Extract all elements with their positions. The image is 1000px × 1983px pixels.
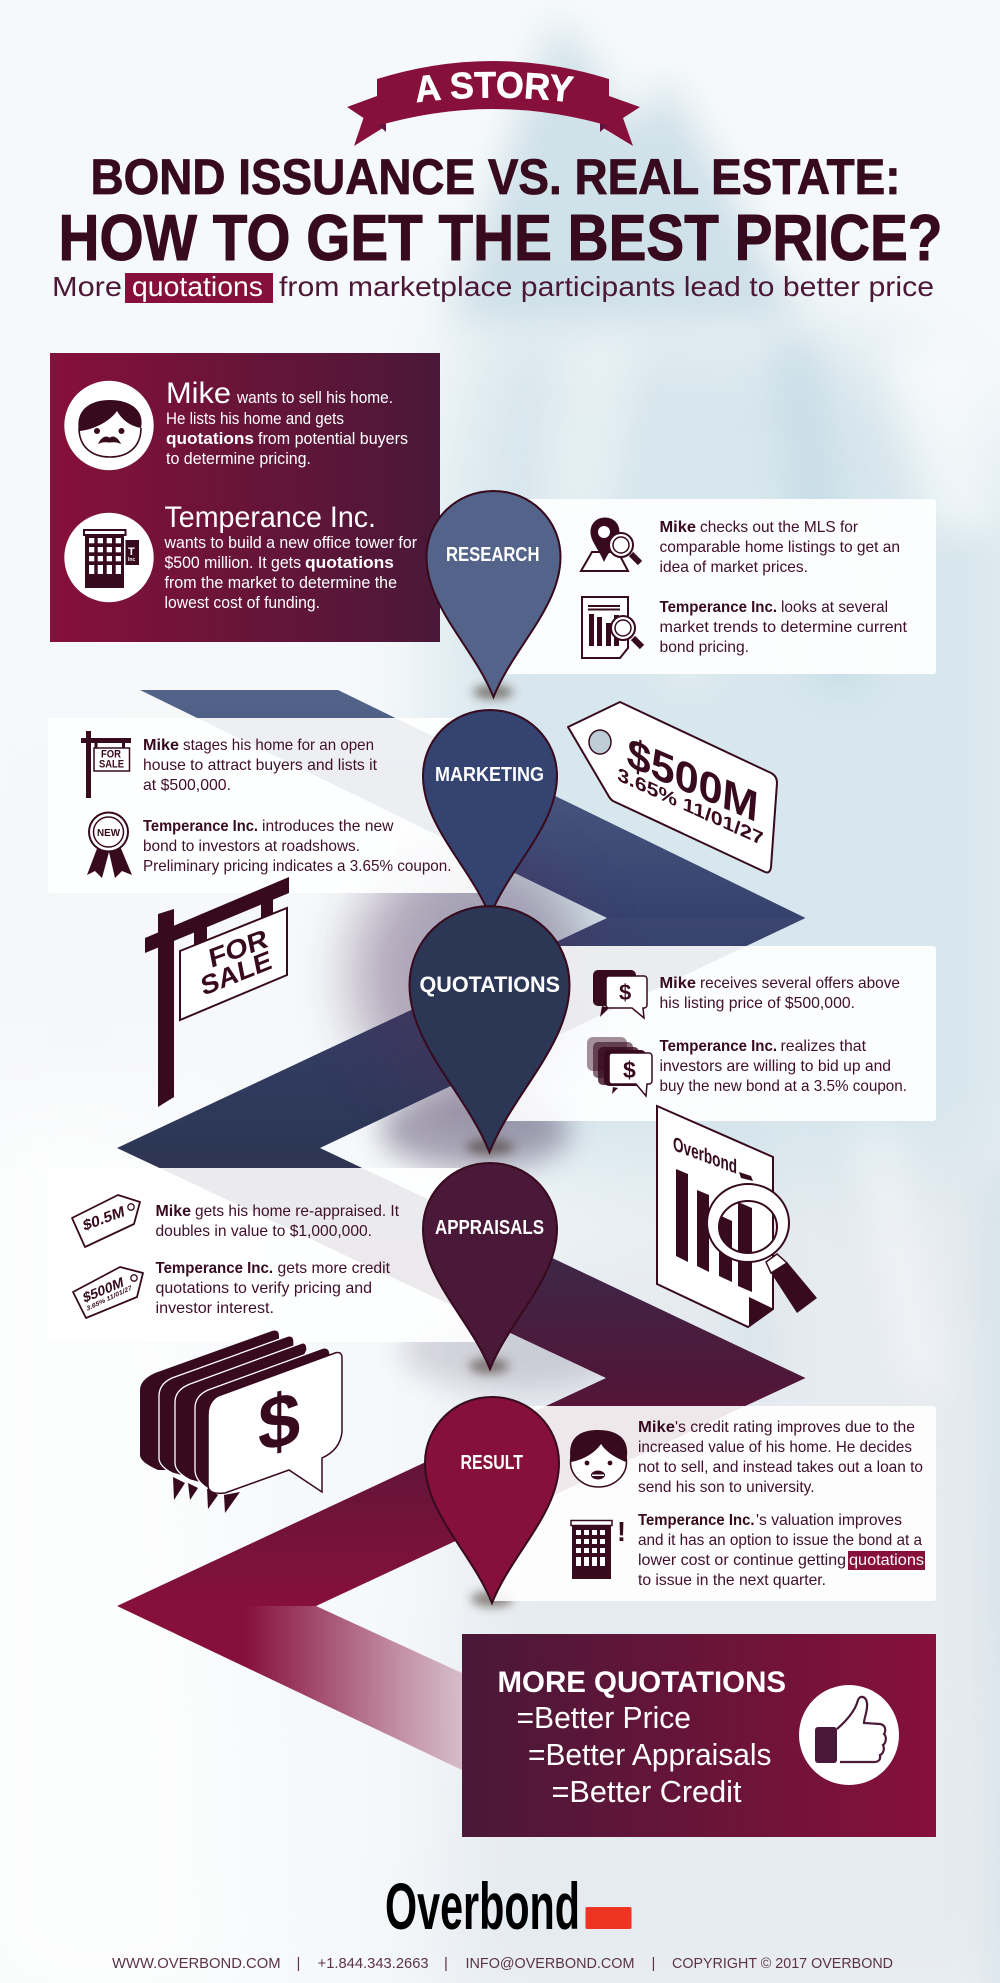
pin: quotations: [410, 906, 569, 1152]
icon: small for-sale sign: SALE: [99, 758, 124, 770]
text: Mike appraisals: doubles in value to $1,000,000.: [156, 1223, 372, 1240]
text: Temperance intro: quotations: [305, 553, 394, 572]
price tag: $500M: [568, 702, 777, 872]
conclusion list: =Better Credit: [552, 1774, 742, 1809]
conclusion list: =Better Appraisals: [528, 1737, 772, 1772]
text: Mike result: send his son to university.: [638, 1479, 814, 1496]
icon: thumbs up: [799, 1685, 899, 1785]
footer contact line: WWW.OVERBOND.COM: [112, 1955, 281, 1972]
icon: Mike portrait: [64, 381, 154, 470]
pin: marketing: [423, 710, 557, 916]
text: Temperance research: market trends to determine current: [660, 619, 908, 636]
text: Mike intro: wants to sell his home.: [236, 388, 393, 407]
text: Mike research: checks out the MLS for: [700, 519, 859, 536]
title: BOND ISSUANCE VS. REAL ESTATE:: [90, 149, 900, 205]
text: Temperance intro: Temperance Inc.: [164, 501, 376, 534]
text: Temperance appraisals: [156, 1260, 391, 1317]
icon: new-issue rosette: [87, 812, 132, 878]
folded ribbon: [117, 690, 806, 1770]
pin shadow: quotations: [466, 1139, 514, 1155]
conclusion list: [516, 1700, 772, 1809]
text: Temperance result: lower cost or continue getting: [638, 1552, 846, 1569]
text: Mike result: 's credit rating improves due to the: [675, 1419, 915, 1436]
text: Temperance appraisals: Temperance Inc.: [156, 1260, 273, 1277]
icon: small for-sale sign: FOR: [101, 748, 121, 760]
icon: Mike's wife portrait: [570, 1430, 627, 1487]
icon: stacked offer bubbles: $: [623, 1057, 636, 1083]
text: Mike marketing: at $500,000.: [143, 777, 231, 794]
icon: Overbond report with magnifier: Overbond: [673, 1133, 737, 1179]
text: Temperance research: bond pricing.: [660, 639, 749, 656]
conclusion list: =Better Price: [516, 1700, 691, 1735]
panel: conclusion: [462, 1634, 936, 1837]
text: Temperance marketing: Preliminary pricing indicates a 3.65% coupon.: [143, 858, 452, 875]
icon: Temperance building: [64, 513, 154, 602]
price tag: $500M: 3.65% 11/01/27: [617, 764, 764, 850]
text: Temperance quotations: investors are willing to bid up and: [660, 1058, 891, 1075]
footer contact line: |: [652, 1955, 655, 1972]
text: Mike research: comparable home listings to get an: [660, 539, 900, 556]
pin: research: RESEARCH: [446, 544, 540, 566]
pin: result: RESULT: [460, 1452, 523, 1474]
icon: large for-sale sign: [145, 877, 289, 1107]
text: Mike quotations: his listing price of $500,000.: [660, 995, 855, 1012]
pin shadow: result: [471, 1591, 513, 1607]
pin: result: [425, 1397, 559, 1603]
icon: small tag $500M: 3.65% 11/01/27: [86, 1285, 132, 1313]
icon: small tag $500M: $500M: [82, 1275, 125, 1307]
footer contact line: |: [444, 1955, 448, 1972]
footer contact line: [112, 1955, 893, 1972]
text: Temperance intro: wants to build a new office tower for: [164, 533, 417, 552]
text: Mike marketing: Mike: [143, 737, 179, 754]
conclusion heading: MORE QUOTATIONS: [498, 1666, 786, 1699]
text: Temperance intro: [164, 501, 417, 612]
text: Mike intro: Mike: [166, 377, 231, 410]
subtitle: from marketplace participants lead to better price: [279, 271, 934, 302]
icon: offer bubble: [593, 970, 647, 1018]
text: Mike intro: from potential buyers: [258, 429, 408, 448]
icon: small tag $500M: [73, 1267, 143, 1318]
icon: large for-sale sign: SALE: [198, 944, 274, 1002]
text: Mike marketing: [143, 737, 378, 794]
text: Temperance quotations: [660, 1038, 907, 1095]
text: Temperance intro: $500 million. It gets: [164, 553, 301, 572]
icon: large for-sale sign: FOR: [206, 922, 271, 974]
text: Temperance result: quotations: [849, 1552, 924, 1569]
price tag: $500M: $500M: [625, 729, 760, 832]
text: Mike result: [638, 1419, 923, 1496]
text: Temperance result: and it has an option to issue the bond at a: [638, 1532, 922, 1549]
text: Temperance marketing: Temperance Inc.: [143, 818, 258, 835]
icon: small for-sale sign: [81, 731, 131, 798]
icon: stack of quote bubbles: [140, 1331, 342, 1513]
text: Mike intro: He lists his home and gets: [166, 409, 344, 428]
text: Mike result: increased value of his home. He decides: [638, 1439, 912, 1456]
text: Mike research: Mike: [660, 519, 696, 536]
panel: research: [493, 499, 936, 674]
text: Mike research: idea of market prices.: [660, 559, 808, 576]
text: Temperance appraisals: gets more credit: [278, 1260, 391, 1277]
text: Temperance appraisals: quotations to verify pricing and: [156, 1280, 372, 1297]
pin shadow: research: [473, 685, 513, 699]
subtitle: More: [52, 271, 122, 302]
pin: marketing: MARKETING: [435, 764, 544, 786]
text: Mike appraisals: [156, 1203, 400, 1240]
pin: research: [426, 491, 560, 697]
text: Temperance intro: lowest cost of funding.: [164, 593, 320, 612]
footer contact line: COPYRIGHT © 2017 OVERBOND: [672, 1955, 893, 1972]
text: Temperance research: [660, 599, 908, 656]
footer contact line: |: [296, 1955, 300, 1972]
banner: A Story: [347, 61, 640, 146]
pin shadow: appraisals: [469, 1358, 509, 1374]
text: Mike research: [660, 519, 900, 576]
text: Temperance research: looks at several: [781, 599, 888, 616]
text: Mike marketing: house to attract buyers and lists it: [143, 757, 378, 774]
panel: quotations: [490, 946, 936, 1121]
text: Mike appraisals: Mike: [156, 1203, 191, 1220]
pin: appraisals: APPRAISALS: [435, 1217, 544, 1239]
text: Temperance marketing: introduces the new: [262, 818, 394, 835]
text: Mike result: Mike: [638, 1419, 675, 1436]
footer contact line: INFO@OVERBOND.COM: [466, 1955, 634, 1972]
icon: Temperance building: Inc: [128, 557, 135, 563]
text: Temperance quotations: realizes that: [780, 1038, 867, 1055]
text: Temperance intro: from the market to determine the: [164, 573, 397, 592]
text: Mike intro: quotations: [166, 429, 254, 448]
icon: new-issue rosette: NEW: [97, 827, 120, 839]
subtitle: quotations: [132, 271, 263, 302]
icon: Overbond report with magnifier: [657, 1106, 817, 1327]
text: Mike intro: [166, 377, 408, 468]
panel: appraisals: [48, 1168, 490, 1342]
text: Temperance result: 's valuation improves: [756, 1512, 902, 1529]
icon: map pin with magnifier: [581, 518, 640, 571]
icon: building with exclamation: [571, 1516, 626, 1579]
text: Mike quotations: Mike: [660, 975, 696, 992]
icon: offer bubble: $: [619, 980, 631, 1005]
text: Mike appraisals: gets his home re-appraised. It: [195, 1203, 400, 1220]
icon: stack of quote bubbles: $: [258, 1375, 300, 1469]
text: Temperance result: Temperance Inc.: [638, 1512, 754, 1529]
text: Temperance appraisals: investor interest.: [156, 1300, 274, 1317]
banner: A Story: A STORY: [416, 72, 574, 102]
text: Temperance result: to issue in the next quarter.: [638, 1572, 826, 1589]
text: Mike quotations: [660, 975, 900, 1012]
subtitle: [52, 271, 934, 303]
text: Temperance quotations: buy the new bond at a 3.5% coupon.: [660, 1078, 907, 1095]
icon: building with exclamation: !: [617, 1516, 626, 1547]
icon: stacked offer bubbles: [587, 1037, 652, 1096]
icon: report with magnifier: [582, 597, 642, 658]
text: Temperance quotations: Temperance Inc.: [660, 1038, 777, 1055]
icon: small tag $0.5M: $0.5M: [82, 1203, 126, 1235]
text: Temperance research: Temperance Inc.: [660, 599, 777, 616]
panel: result: [492, 1406, 936, 1601]
text: Temperance marketing: [143, 818, 452, 875]
logo: Overbond: Overbond: [385, 1869, 580, 1943]
icon: small tag $0.5M: [72, 1195, 140, 1247]
text: Mike result: not to sell, and instead takes out a loan to: [638, 1459, 923, 1476]
pin: appraisals: [423, 1163, 557, 1369]
text: Temperance marketing: bond to investors at roadshows.: [143, 838, 360, 855]
text: Mike intro: to determine pricing.: [166, 449, 311, 468]
footer contact line: +1.844.343.2663: [318, 1955, 429, 1972]
title: [58, 149, 942, 274]
text: Temperance result: [638, 1512, 925, 1589]
pin: quotations: QUOTATIONS: [420, 972, 560, 997]
panel: intro characters: [50, 353, 440, 642]
text: Mike quotations: receives several offers above: [700, 975, 900, 992]
panel: marketing: [48, 718, 490, 893]
text: Mike marketing: stages his home for an open: [183, 737, 374, 754]
icon: Temperance building: T: [128, 546, 135, 558]
